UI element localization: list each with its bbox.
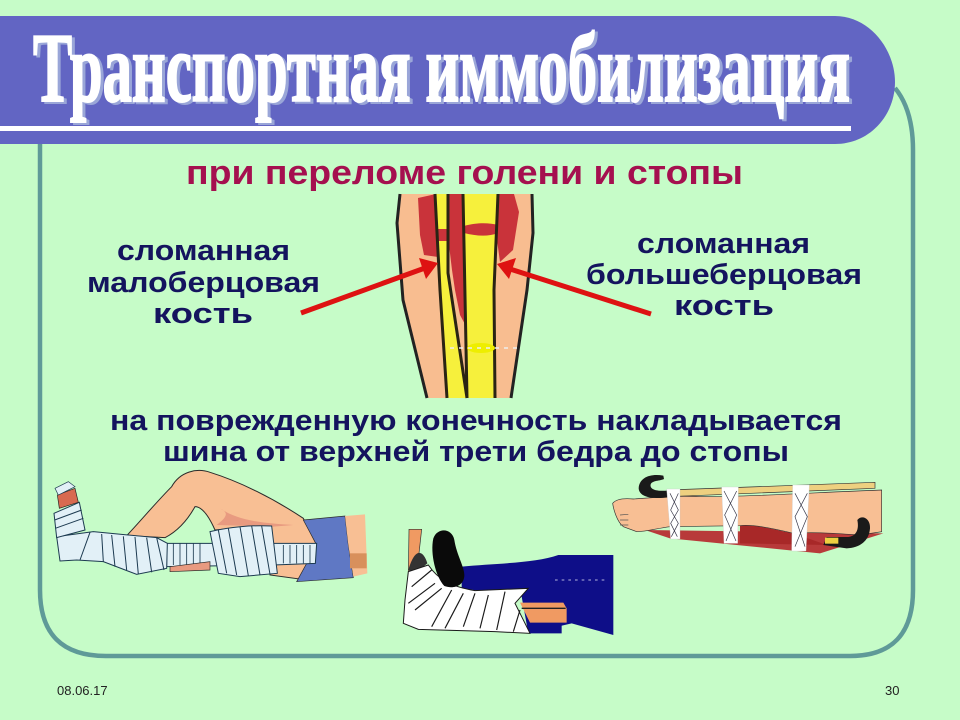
panel: rounded content frame (40, 88, 913, 656)
label: fibula: малоберцовая (87, 267, 320, 299)
label: tibia: большеберцовая (586, 259, 862, 291)
label: tibia: кость (674, 290, 774, 322)
subtitle: при переломе голени и стопы (186, 154, 743, 192)
label: tibia (586, 228, 862, 322)
text block: splint instruction: на поврежденную конечность накладывается (110, 405, 842, 437)
label: fibula: кость (153, 298, 253, 330)
illustration: splint on lower leg with straps (613, 475, 883, 553)
text block: splint instruction: шина от верхней трети бедра до стопы (163, 436, 789, 468)
chart: lower leg bones anatomy (397, 194, 533, 398)
illustration: bandaged bent leg (54, 470, 367, 582)
page number: 30 (885, 683, 899, 698)
illustration: leg on raised splint (403, 529, 613, 635)
arrow: to fibula (301, 258, 438, 313)
label: tibia: сломанная (637, 228, 810, 260)
label: fibula (87, 235, 320, 330)
text block: splint instruction (110, 405, 842, 468)
arrow: to tibia (497, 258, 651, 314)
label: fibula: сломанная (117, 235, 290, 267)
date footer: 08.06.17 (57, 683, 108, 698)
